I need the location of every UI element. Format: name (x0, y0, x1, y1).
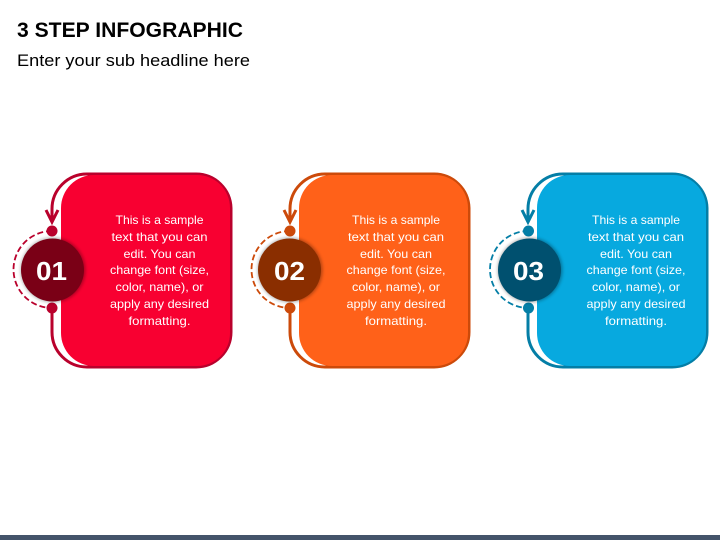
panel: step 1 (14, 174, 231, 367)
card outline with arrow (46, 174, 231, 367)
body text: This is a sample (352, 213, 440, 227)
body text: text that you can (348, 230, 444, 244)
subtitle: Enter your sub headline here (17, 51, 250, 70)
panel: step 3 (490, 174, 707, 367)
connector dots (284, 226, 296, 314)
connector dots (523, 226, 534, 314)
body text: color, name), or (116, 280, 204, 294)
footer bar (0, 535, 720, 540)
number: 02 (274, 256, 305, 286)
number badge (258, 238, 321, 302)
dashed arc (14, 231, 52, 308)
card fill (537, 175, 706, 366)
body text: change font (size, (346, 263, 446, 277)
body text: formatting. (128, 314, 190, 328)
number badge (21, 238, 84, 302)
body text: text that you can (112, 230, 208, 244)
body text: This is a sample (592, 213, 680, 227)
body text: formatting. (365, 314, 427, 328)
card outline with arrow (284, 174, 469, 367)
body text: change font (size, (110, 263, 209, 277)
number badge (498, 238, 561, 302)
number badge shadow (20, 238, 86, 302)
body text: text that you can (588, 230, 684, 244)
body text: apply any desired (346, 297, 446, 311)
number: 01 (36, 256, 67, 286)
connector dots (46, 226, 58, 314)
card outline with arrow (522, 174, 707, 367)
dashed arc (252, 231, 290, 308)
body text (346, 213, 446, 328)
body text: This is a sample (116, 213, 204, 227)
body text: color, name), or (592, 280, 680, 294)
title: 3 STEP INFOGRAPHIC (17, 18, 243, 42)
dashed arc (490, 231, 528, 308)
card fill (61, 175, 230, 366)
body text: edit. You can (600, 247, 672, 261)
body text (110, 213, 209, 328)
body text: apply any desired (586, 297, 686, 311)
number: 03 (513, 256, 544, 286)
body text: formatting. (605, 314, 667, 328)
number badge shadow (258, 238, 322, 302)
body text (586, 213, 686, 328)
body text: edit. You can (124, 247, 196, 261)
number badge shadow (498, 238, 562, 302)
body text: edit. You can (360, 247, 432, 261)
body text: color, name), or (352, 280, 440, 294)
body text: apply any desired (110, 297, 209, 311)
panel: step 2 (252, 174, 469, 367)
card fill (299, 175, 468, 366)
body text: change font (size, (586, 263, 686, 277)
